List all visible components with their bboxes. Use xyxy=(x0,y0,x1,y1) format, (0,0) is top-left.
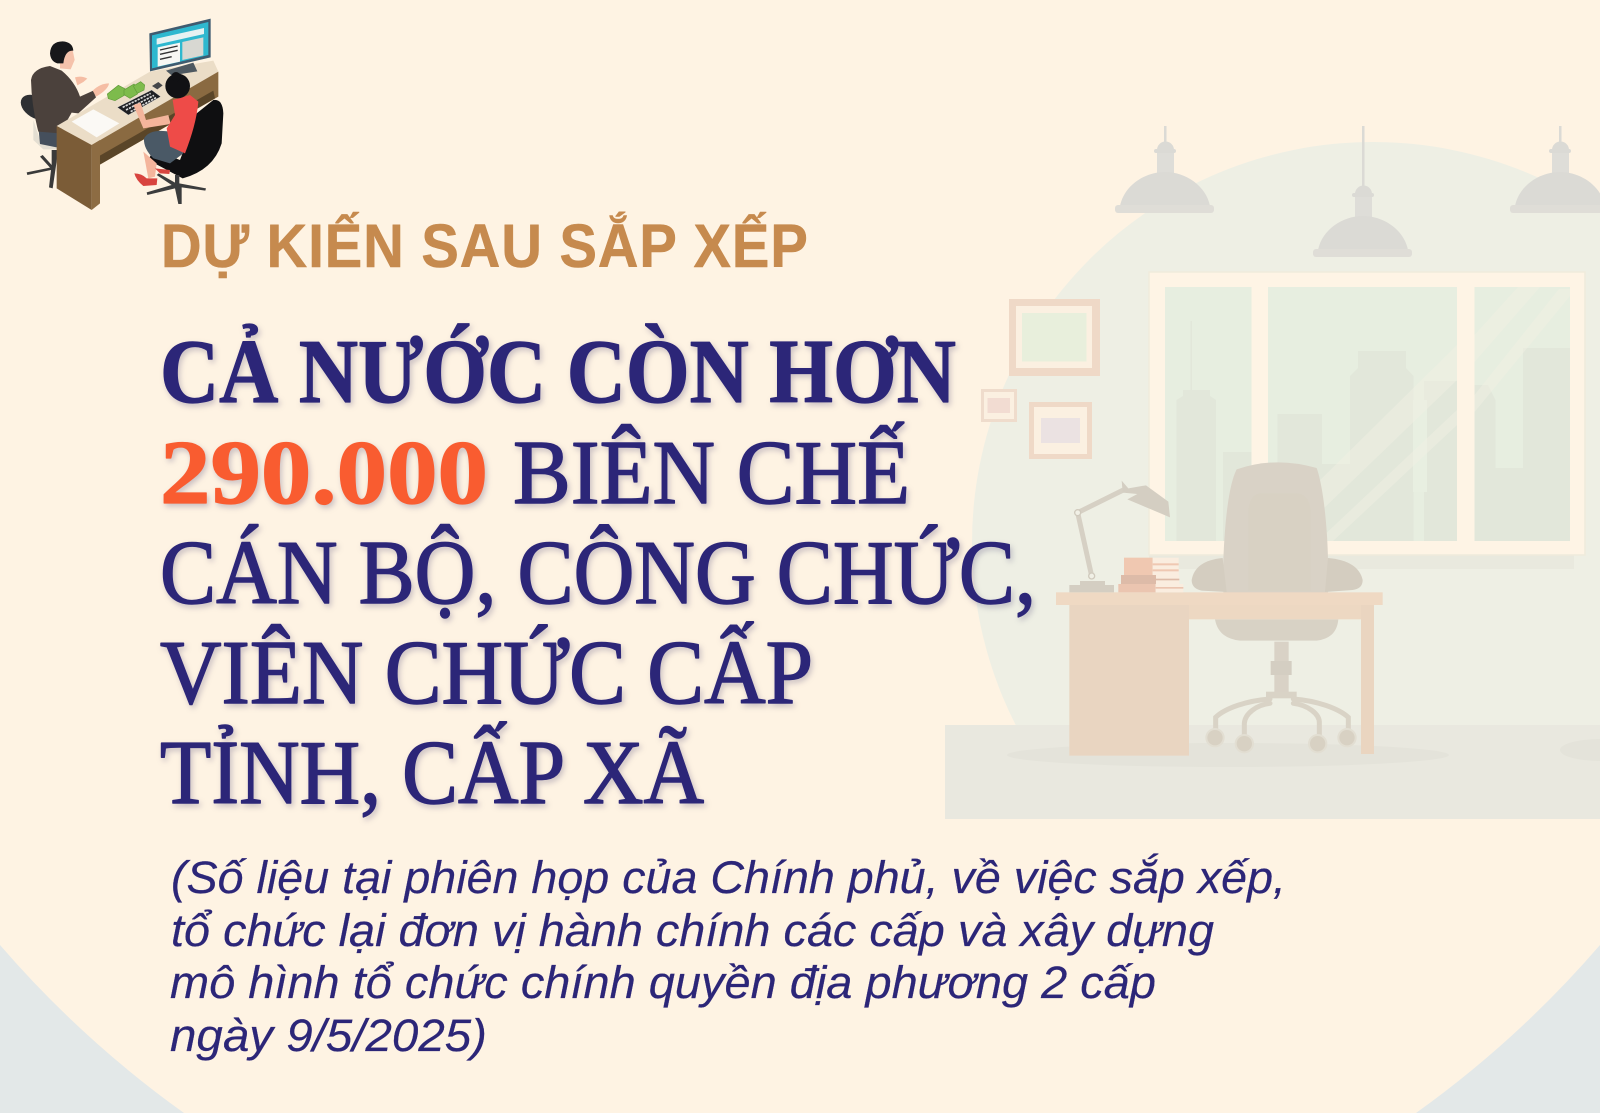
desk xyxy=(1056,592,1383,756)
office background illustration xyxy=(945,126,1600,819)
source note: tổ chức lại đơn vị hành chính các cấp và xây dựng xyxy=(171,905,1214,956)
main heading xyxy=(160,321,1036,823)
kicker heading: DỰ KIẾN SAU SẮP XẾP xyxy=(161,211,808,281)
ceiling lamps xyxy=(1115,126,1600,257)
desk, chair, lamp and books xyxy=(1056,462,1383,756)
lilac frame xyxy=(1029,402,1092,459)
man's chair xyxy=(16,89,59,188)
window with city skyline xyxy=(1149,272,1585,569)
desk xyxy=(57,61,218,210)
money stacks xyxy=(107,82,145,101)
paper xyxy=(72,109,119,137)
source note xyxy=(170,852,1286,1061)
highlighted number: 290.000 xyxy=(160,422,488,523)
woman xyxy=(133,72,198,186)
source note: mô hình tổ chức chính quyền địa phương 2 cấp xyxy=(170,957,1156,1008)
heading line 5: TỈNH, CẤP XÃ xyxy=(160,722,704,823)
wall picture frames xyxy=(981,299,1100,459)
small pink frame xyxy=(981,389,1017,422)
desk lamp xyxy=(1069,481,1170,592)
source note: ngày 9/5/2025) xyxy=(170,1010,487,1061)
heading line 3: CÁN BỘ, CÔNG CHỨC, xyxy=(160,522,1036,623)
heading line 2: BIÊN CHẾ xyxy=(513,422,910,523)
icon: two people at office desk xyxy=(16,19,223,210)
heading line 1: CẢ NƯỚC CÒN HƠN xyxy=(160,321,956,422)
woman's chair base xyxy=(147,173,206,204)
room circle xyxy=(972,142,1600,725)
bottom corner background shapes xyxy=(0,945,1600,1113)
man xyxy=(31,41,109,147)
monitor xyxy=(149,19,211,75)
source note: (Số liệu tại phiên họp của Chính phủ, về việc sắp xếp, xyxy=(171,852,1286,903)
office chair xyxy=(1192,462,1363,752)
keyboard xyxy=(117,90,161,115)
stacked books xyxy=(1118,558,1183,592)
mouse xyxy=(152,82,163,89)
woman's chair xyxy=(148,100,223,178)
floor xyxy=(945,725,1600,819)
large green frame xyxy=(1009,299,1100,376)
heading line 4: VIÊN CHỨC CẤP xyxy=(160,622,813,723)
